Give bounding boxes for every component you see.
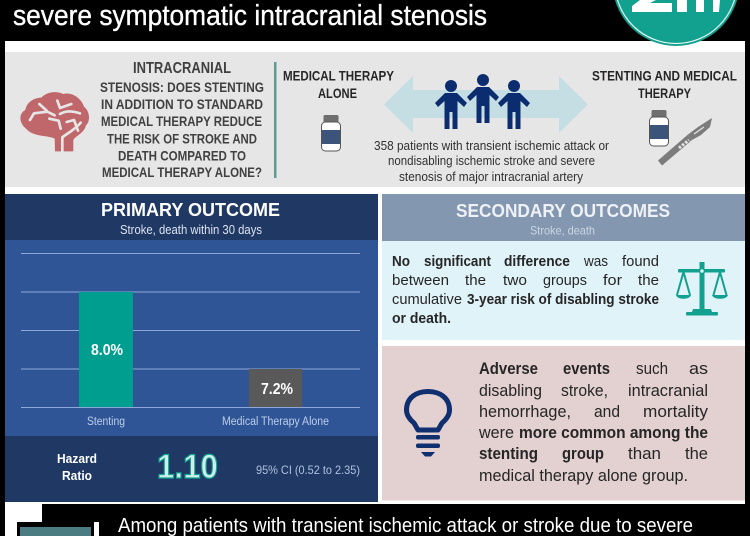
panel: primary outcome <box>5 194 378 502</box>
question text: MEDICAL THERAPY REDUCE <box>101 113 262 129</box>
axis labels: Stenting <box>87 416 125 428</box>
bar: stenting: 8.0% <box>91 342 123 359</box>
text block: No <box>392 253 410 270</box>
text block: for <box>603 272 622 289</box>
text block: between <box>392 272 449 289</box>
axis labels <box>87 416 329 428</box>
question text: DEATH COMPARED TO <box>118 148 246 164</box>
question text: IN ADDITION TO STANDARD <box>101 96 263 112</box>
text block: group <box>562 445 604 463</box>
text block: medical therapy alone group. <box>479 467 688 485</box>
text block: disabling <box>479 382 542 400</box>
hazard ratio <box>57 448 360 486</box>
footer: conclusion banner <box>5 504 693 536</box>
text block <box>478 360 709 485</box>
icon box <box>17 522 94 536</box>
axis labels: Medical Therapy Alone <box>222 416 329 428</box>
text block: difference <box>504 253 570 270</box>
population text: 358 patients with transient ischemic attack or <box>374 138 610 153</box>
label: medical therapy alone <box>283 68 395 101</box>
population text: stenosis of major intracranial artery <box>399 169 583 184</box>
icon: light bulb <box>406 392 450 456</box>
bar: medical therapy alone <box>249 369 302 407</box>
icon: medicine bottle <box>322 115 340 151</box>
text block: were <box>478 424 514 442</box>
text block: found <box>622 253 659 270</box>
hazard ratio: 95% CI (0.52 to 2.35) <box>256 463 360 477</box>
question text: MEDICAL THERAPY ALONE? <box>102 164 262 180</box>
label: medical therapy alone: MEDICAL THERAPY <box>283 68 395 84</box>
question text: INTRACRANIAL <box>133 60 231 77</box>
panel: study question and design <box>5 52 745 187</box>
text block: significant <box>424 253 491 270</box>
question text <box>100 60 264 180</box>
text block: stroke, <box>561 382 608 400</box>
panel: no significant difference <box>382 241 745 340</box>
text block: and <box>594 403 620 421</box>
arrow: double-headed comparison <box>384 76 588 133</box>
icon: scalpel <box>658 118 712 166</box>
panel: secondary outcomes header: SECONDARY OUTCOMES <box>456 200 670 221</box>
text block: more common among the <box>519 424 708 442</box>
text block: groups <box>543 272 587 289</box>
text block: was <box>583 253 608 270</box>
icon: medicine bottle <box>650 110 668 146</box>
icon: balance scale <box>676 262 728 316</box>
population text: nondisabling ischemic stroke and severe <box>388 153 595 168</box>
bar: stenting <box>79 292 133 407</box>
hazard ratio: Ratio <box>62 468 92 483</box>
question text: STENOSIS: DOES STENTING <box>100 79 264 95</box>
logo: 2 minute medicine badge <box>612 0 740 46</box>
panel: secondary outcomes header <box>382 194 745 241</box>
panel: secondary outcomes header: Stroke, death <box>530 224 595 238</box>
bar chart <box>21 254 360 428</box>
text block: the <box>685 445 708 463</box>
question text: THE RISK OF STROKE AND <box>107 130 257 146</box>
bar: medical therapy alone: 7.2% <box>261 381 293 398</box>
panel: adverse events <box>382 346 745 500</box>
text block: events <box>563 360 610 378</box>
text block: two <box>503 272 527 289</box>
text block: or death. <box>392 310 451 327</box>
label: stenting and medical therapy <box>592 68 737 101</box>
text block: as <box>689 360 708 378</box>
text block: cumulative <box>392 291 462 308</box>
text block <box>392 253 659 327</box>
text block: than <box>628 445 661 463</box>
label: medical therapy alone: ALONE <box>318 85 357 101</box>
text block: stenting <box>479 445 538 463</box>
text block: such <box>636 360 668 378</box>
text block: Adverse <box>479 360 538 378</box>
hazard ratio: 1.10 <box>157 448 218 486</box>
population text <box>374 138 610 184</box>
text block: hemorrhage, <box>479 403 571 421</box>
label: stenting and medical therapy: THERAPY <box>638 85 692 101</box>
text block: intracranial <box>628 382 708 400</box>
heading: PRIMARY OUTCOME <box>101 199 280 220</box>
hazard ratio: Hazard <box>57 451 97 466</box>
text block: the <box>465 272 486 289</box>
icon: three people <box>435 74 530 129</box>
subheading: Stroke, death within 30 days <box>120 223 262 237</box>
icon: brain <box>20 92 89 151</box>
title: severe symptomatic intracranial stenosis <box>13 0 487 32</box>
text block: the <box>638 272 659 289</box>
text block: 3-year risk of disabling stroke <box>467 291 659 308</box>
text block: mortality <box>643 403 709 421</box>
